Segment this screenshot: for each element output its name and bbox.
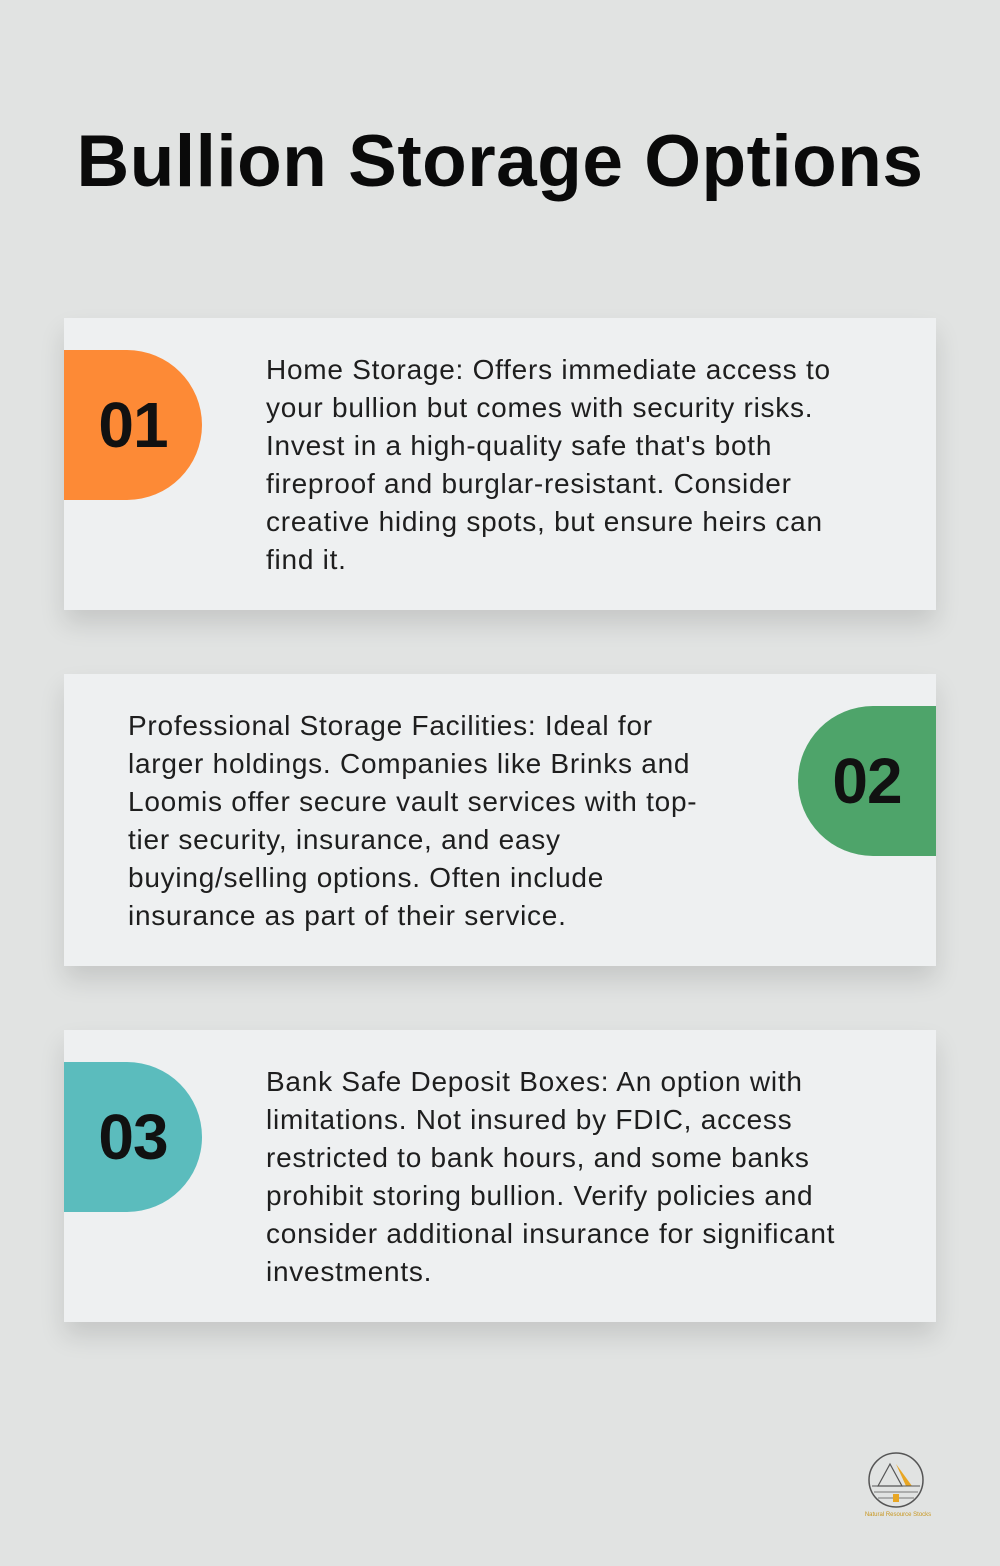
text: bank boxes [266,1066,835,1287]
badge 03: 03 [98,1101,168,1173]
text: bank boxes: limitations. Not insured by FDIC, access [266,1104,792,1135]
text: professional storage: Professional Storage Facilities: Ideal for [128,710,653,741]
badge 02 [798,706,936,856]
text: home storage: Invest in a high-quality safe that's both [266,430,772,461]
logo: Natural Resource Stocks [865,1512,931,1518]
text: bank boxes: restricted to bank hours, and some banks [266,1142,810,1173]
text: bank boxes: prohibit storing bullion. Verify policies and [266,1180,813,1211]
text: professional storage [128,710,697,931]
panel: bank boxes [64,1030,936,1322]
badge 02: 02 [832,745,902,817]
text: professional storage: larger holdings. Companies like Brinks and [128,748,690,779]
text: home storage: your bullion but comes with security risks. [266,392,813,423]
panel: home storage [64,318,936,610]
text: bank boxes: Bank Safe Deposit Boxes: An option with [266,1066,803,1097]
badge 01 [64,350,202,500]
text: bank boxes: investments. [266,1256,432,1287]
text: professional storage: Loomis offer secure vault services with top- [128,786,697,817]
badge 01: 01 [98,389,168,461]
text: home storage: Home Storage: Offers immediate access to [266,354,831,385]
logo [865,1452,931,1518]
text: home storage [266,354,831,575]
text: professional storage: tier security, insurance, and easy [128,824,561,855]
text: professional storage: buying/selling options. Often include [128,862,604,893]
badge 03 [64,1062,202,1212]
title: Bullion Storage Options [77,121,923,202]
text: home storage: fireproof and burglar-resistant. Consider [266,468,792,499]
text: home storage: creative hiding spots, but ensure heirs can [266,506,823,537]
text: home storage: find it. [266,544,347,575]
text: bank boxes: consider additional insurance for significant [266,1218,835,1249]
panel: professional storage [64,674,936,966]
text: professional storage: insurance as part of their service. [128,900,567,931]
